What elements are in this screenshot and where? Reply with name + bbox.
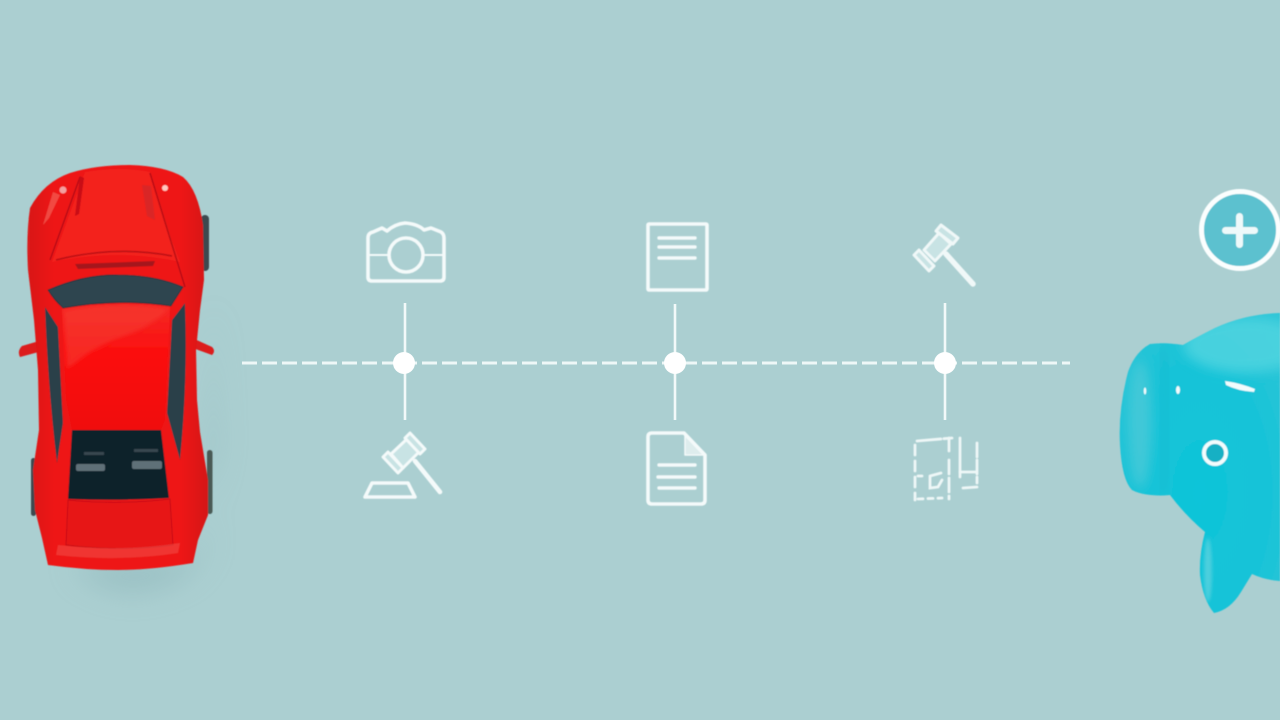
car rear window — [68, 430, 169, 500]
car rear window slats — [76, 449, 162, 471]
icon: gavel with sound block — [365, 433, 440, 497]
car roof — [62, 304, 170, 430]
milestone 1: connector and node — [393, 303, 415, 420]
milestone 3: connector and node — [934, 303, 956, 420]
car wheels — [31, 215, 212, 516]
icon: dashed floor plan — [915, 438, 977, 500]
icon: document with folded corner — [648, 433, 705, 504]
icon: camera — [368, 223, 444, 281]
milestone 2: connector and node — [664, 304, 686, 420]
piggy eye ring — [1204, 442, 1226, 464]
icon: plus badge — [1202, 192, 1278, 268]
car mirrors — [19, 337, 214, 357]
snout rim shading — [1128, 360, 1152, 490]
car rear deck — [66, 499, 173, 548]
piggy bank shading — [1128, 317, 1280, 602]
upper sheen — [1183, 317, 1280, 373]
leg highlight — [1204, 538, 1212, 602]
car side windows — [45, 303, 186, 463]
image: turquoise piggy bank — [1120, 313, 1280, 613]
car hood creases — [50, 173, 185, 287]
car hood vents — [43, 176, 168, 269]
car shadow — [70, 300, 218, 591]
car roof highlight — [64, 306, 168, 368]
icon: gavel on top right — [914, 225, 973, 284]
car windshield — [48, 275, 183, 308]
car body — [27, 165, 208, 570]
car bumper highlight — [56, 543, 180, 558]
timeline: dashed horizontal axis — [242, 362, 1070, 364]
piggy highlights — [1144, 381, 1255, 394]
car hood — [52, 169, 180, 262]
image: red toy car seen from above — [19, 165, 214, 570]
piggy bank body — [1120, 313, 1280, 613]
snout groove — [1162, 345, 1167, 495]
icon: document with lines — [648, 224, 707, 290]
